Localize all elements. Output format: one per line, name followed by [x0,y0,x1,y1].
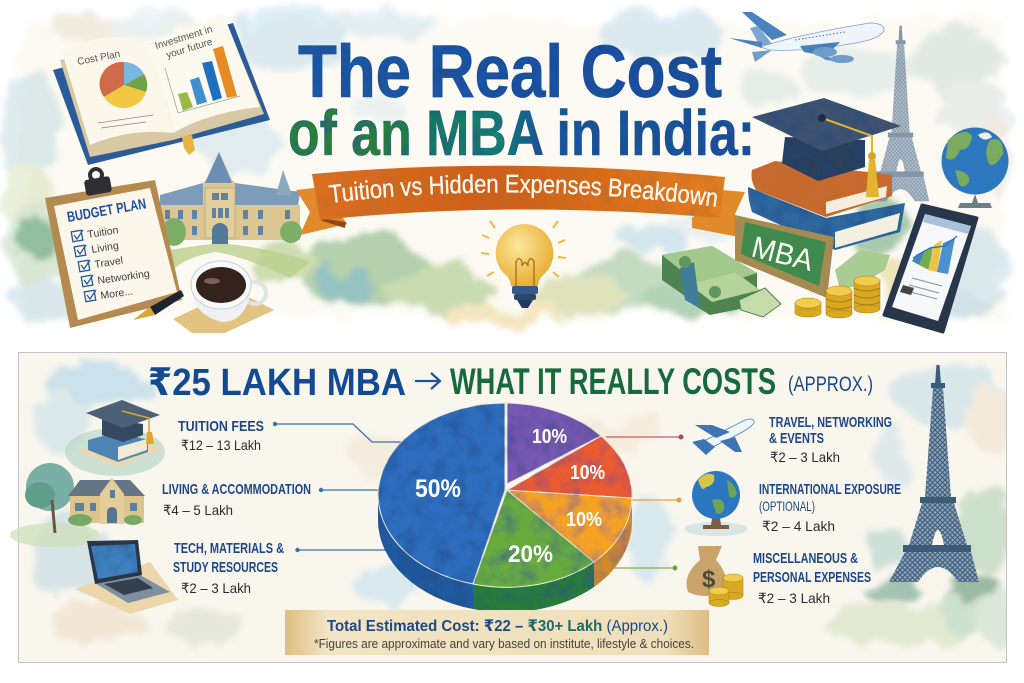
checklist: Networking [97,268,151,287]
item: miscellaneous and personal: MISCELLANEOUS & [753,550,858,567]
slice sides [378,495,632,612]
callout: total estimated cost: Total Estimated Cost: ₹22 – ₹30+ Lakh (Approx.) [327,618,668,635]
illustration: open book with charts [53,13,270,165]
heading: cost headline: (APPROX.) [788,373,873,396]
icon: small airplane [692,419,754,455]
ribbon: subtitle [296,166,745,236]
item: international exposure [759,481,901,534]
icon: MBA sign [735,215,834,298]
icon: light bulb [481,221,566,308]
illustration: money stacks [662,246,890,317]
item: tech and materials: TECH, MATERIALS & [174,540,284,557]
pie percentages: 10% [566,509,602,531]
item: tuition fees: TUITION FEES [178,418,264,435]
icon: gold coins [795,276,880,318]
illustration: eiffel tower [889,365,979,582]
item: living and accommodation: LIVING & ACCOMMODATION [162,481,311,498]
item: travel and networking: & EVENTS [769,430,824,447]
item: miscellaneous and personal [753,550,871,606]
item: living and accommodation [162,481,311,518]
icon: airplane [729,12,884,63]
pie percentages: 10% [570,462,605,484]
checklist: Travel [94,255,124,271]
item: tech and materials: STUDY RESOURCES [173,559,278,576]
text: investment in your future: Investment in [154,24,214,52]
item: miscellaneous and personal: ₹2 – 3 Lakh [758,590,830,606]
slice: tech 10% [507,403,601,484]
chart: expense pie [378,403,632,612]
callout: total estimated cost: *Figures are approximate and vary based on institute, lifestyle & choices. [314,637,694,651]
pie percentages: 20% [508,541,553,568]
title [288,30,755,169]
heading: cost headline: ₹25 LAKH MBA [148,362,406,404]
list: right cost items [753,414,901,606]
slice: tuition 50% [378,403,505,584]
checklist: Living [91,240,120,256]
item: tuition fees: ₹12 – 13 Lakh [181,437,261,453]
title line 1: The Real Cost [298,30,722,113]
item: travel and networking [769,414,892,465]
arrow [415,373,440,389]
checklist [71,224,151,302]
icon: graduation cap [752,98,901,197]
text: cost plan: Cost Plan [76,49,121,68]
icon: laptop [75,540,178,614]
item: international exposure: INTERNATIONAL EXPOSURE [759,481,901,498]
slice: international 10% [507,490,632,562]
checklist: More... [100,286,134,302]
pie percentages [415,426,605,568]
icon: money bag and coins [686,546,743,606]
title line 2: of an MBA in India: [288,97,755,169]
pie percentages: 10% [532,426,567,448]
leader lines [273,422,684,570]
icon: smartphone [884,205,977,332]
illustration: university building [160,152,310,278]
text: investment in your future: your future [165,37,214,61]
item: tech and materials [173,540,284,596]
icon: small globe [684,471,748,536]
icon: cap and book [65,400,165,476]
chart: bars in book [165,46,240,113]
item: living and accommodation: ₹4 – 5 Lakh [163,502,233,518]
illustration: clipboard budget plan [45,169,184,328]
list: left cost items [162,418,311,596]
panel: hero banner [0,2,1016,335]
item: tuition fees [178,418,264,453]
icon: money bag and coins: $ [702,566,716,593]
icon: house and tree [10,463,145,547]
heading: cost headline: WHAT IT REALLY COSTS [450,361,776,402]
slice: misc 20% [473,490,594,587]
illustration: books stack [748,161,905,250]
callout: total estimated cost [285,610,709,655]
item: miscellaneous and personal: PERSONAL EXPENSES [753,569,871,586]
slice: travel 10% [507,436,632,498]
item: international exposure: (OPTIONAL) [759,498,815,514]
item: travel and networking: TRAVEL, NETWORKING [769,414,892,431]
illustration: coffee cup [173,261,274,333]
chart: pie in book [100,62,147,108]
pie percentages: 50% [415,475,461,503]
ribbon: subtitle: Tuition vs Hidden Expenses Breakdown [328,174,717,207]
heading: budget plan: BUDGET PLAN [66,196,147,226]
checklist: Tuition [87,224,119,241]
item: international exposure: ₹2 – 4 Lakh [762,518,835,534]
heading: cost headline [148,361,873,404]
icon: globe [942,128,1008,208]
panel: cost breakdown [10,352,1020,662]
item: tech and materials: ₹2 – 3 Lakh [181,580,251,596]
icon: MBA sign: MBA [748,231,816,278]
icon: eiffel tower background [866,26,929,201]
item: travel and networking: ₹2 – 3 Lakh [770,449,840,465]
